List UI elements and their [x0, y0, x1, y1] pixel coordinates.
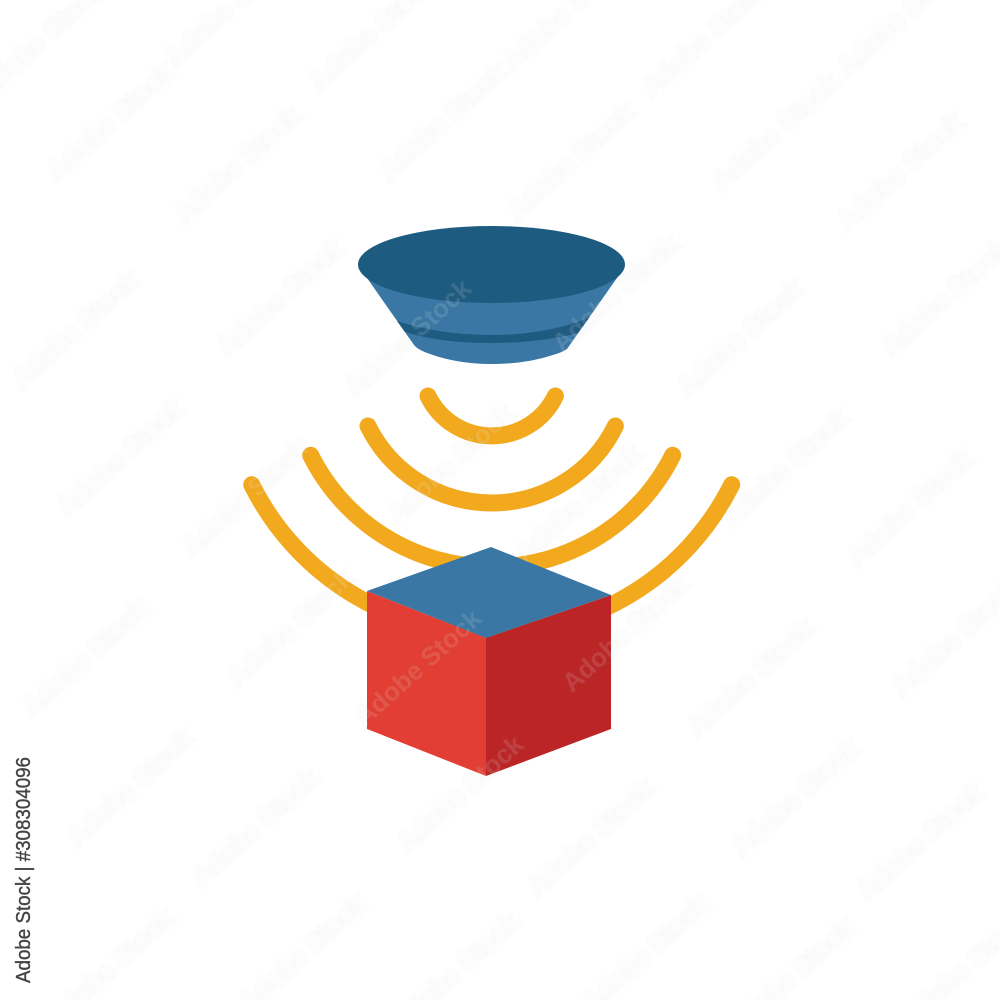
watermark pattern: Adobe Stock — [831, 107, 969, 236]
watermark pattern: Adobe Stock — [349, 603, 487, 732]
watermark pattern: Adobe Stock — [211, 233, 349, 362]
sensor bowl — [358, 226, 625, 364]
signal waves — [252, 396, 732, 633]
stock id label: Adobe Stock | #308304096 — [13, 757, 35, 983]
watermark pattern: Adobe Stock — [16, 593, 154, 722]
bowl top ellipse — [358, 226, 625, 303]
watermark pattern: Adobe Stock — [841, 443, 979, 572]
watermark pattern: Adobe Stock — [681, 613, 819, 742]
watermark pattern: Adobe Stock — [61, 723, 199, 852]
watermark pattern: Adobe Stock — [221, 563, 359, 692]
watermark pattern: Adobe Stock — [556, 569, 694, 698]
watermark pattern: Adobe Stock — [41, 57, 179, 186]
cube top face — [367, 547, 611, 638]
cube — [367, 547, 611, 776]
cube left face — [367, 591, 486, 776]
bowl body — [360, 268, 624, 364]
watermark pattern: Adobe Stock — [176, 433, 314, 562]
watermark pattern: Adobe Stock — [726, 733, 864, 862]
watermark pattern: Adobe Stock — [671, 273, 809, 402]
watermark pattern: Adobe Stock — [706, 67, 844, 196]
watermark pattern: Adobe Stock — [521, 773, 659, 902]
watermark pattern: Adobe Stock — [546, 229, 684, 358]
wave 4 — [252, 485, 732, 633]
bowl band — [397, 318, 589, 343]
watermark pattern: Adobe Stock — [373, 57, 511, 186]
watermark pattern: Adobe Stock — [501, 97, 639, 226]
watermark pattern: Adobe Stock — [391, 729, 529, 858]
watermark pattern: Adobe Stock — [339, 273, 477, 402]
wave 1 — [428, 396, 555, 436]
watermark pattern: Adobe Stock — [168, 100, 306, 229]
watermark pattern: Adobe Stock — [186, 763, 324, 892]
wave 2 — [368, 426, 615, 503]
watermark pattern: Adobe Stock — [51, 393, 189, 522]
watermark pattern: Adobe Stock — [851, 777, 989, 906]
watermark pattern: Adobe Stock — [509, 439, 647, 568]
cube right face — [486, 595, 611, 776]
watermark pattern: Adobe Stock — [6, 265, 144, 394]
watermark pattern: Adobe Stock — [716, 403, 854, 532]
wave 3 — [311, 455, 673, 567]
watermark pattern: Adobe Stock — [381, 399, 519, 528]
